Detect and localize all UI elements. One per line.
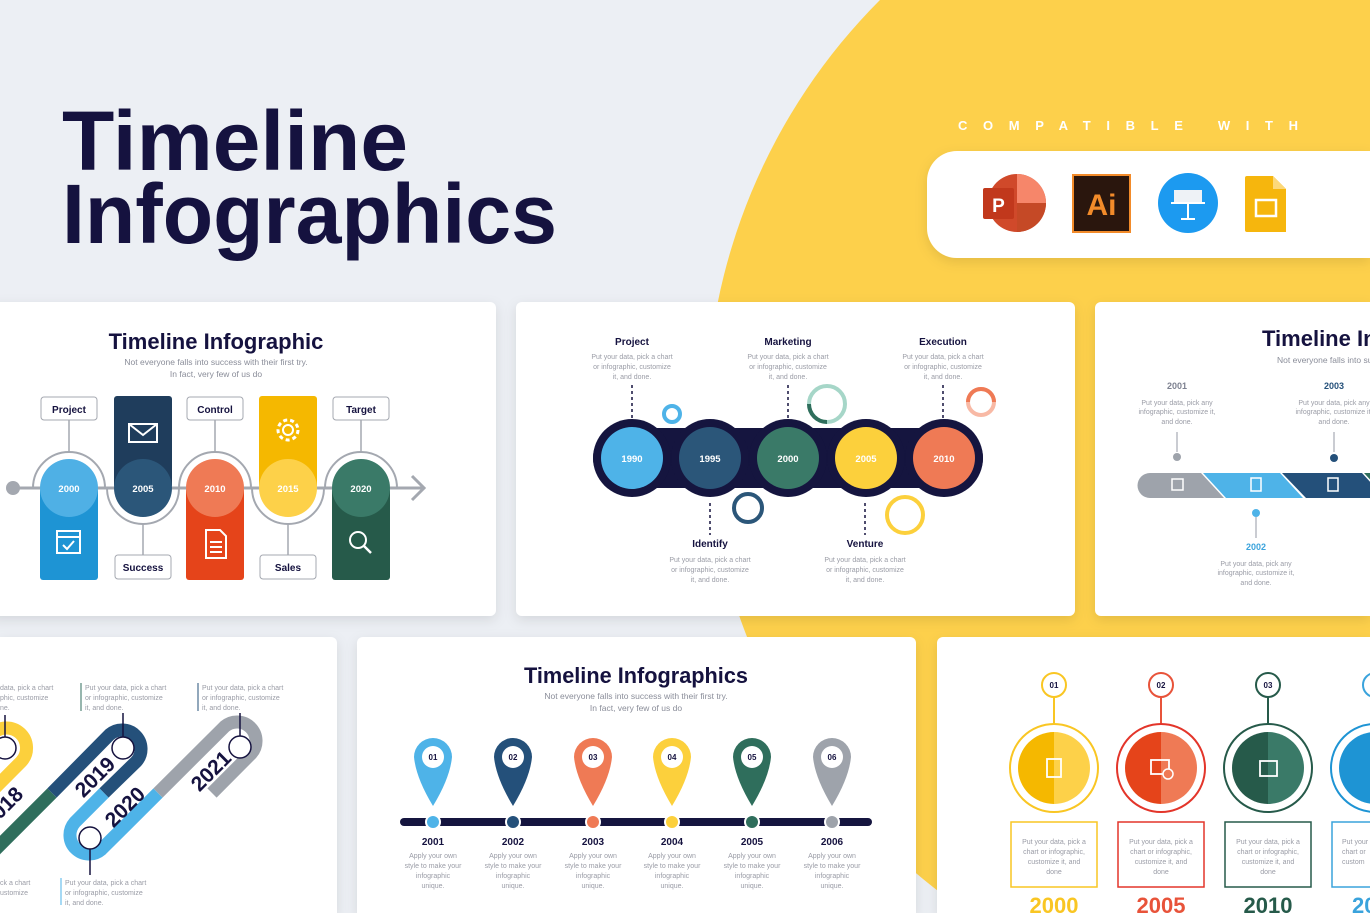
labels below: or infographic, customize — [826, 567, 904, 574]
step 04 partial: chart or — [1342, 849, 1366, 856]
step 2015 sales: Sales — [275, 563, 302, 574]
step 03 2010: customize it, and — [1242, 859, 1294, 866]
card A heading — [109, 329, 323, 379]
labels above: or infographic, customize — [593, 364, 671, 371]
step 02 2005: 02 — [1157, 681, 1166, 690]
background yellow circle — [706, 0, 1370, 913]
icon: keynote — [1158, 173, 1218, 233]
text notes: Put your data, pick a chart — [85, 685, 166, 692]
segmented bar — [1138, 473, 1370, 498]
year captions: unique. — [502, 883, 525, 890]
year labels: 2019 — [71, 753, 120, 802]
pins: 04 — [668, 753, 677, 762]
labels above: it, and done. — [769, 374, 807, 381]
step 2010 control — [186, 397, 244, 580]
chain band: 2005 — [855, 454, 877, 465]
step 2000 project — [40, 397, 98, 580]
labels below: Identify — [692, 539, 728, 550]
step 2000 project: 2000 — [58, 484, 80, 495]
milestone 2001: infographic, customize it, — [1138, 409, 1216, 416]
milestone 2003: and done. — [1318, 419, 1350, 426]
pins: 06 — [828, 753, 837, 762]
panel: card D diagonal timeline — [0, 637, 337, 913]
step 01 2000: Put your data, pick a — [1022, 839, 1086, 846]
year captions: Apply your own — [648, 853, 696, 860]
timeline bar — [404, 818, 868, 826]
step 02 2005: chart or infographic, — [1130, 849, 1192, 856]
year captions: unique. — [422, 883, 445, 890]
text notes: it, and done. — [65, 900, 104, 907]
labels above: Execution — [919, 337, 967, 348]
year captions: 2001 — [422, 837, 445, 848]
labels above: it, and done. — [924, 374, 962, 381]
milestone 2001: 2001 — [1167, 381, 1187, 391]
labels below: it, and done. — [691, 577, 729, 584]
milestone 2002 — [1217, 509, 1295, 587]
step 01 2000: 01 — [1050, 681, 1059, 690]
panel: compatible apps — [927, 151, 1370, 258]
text notes: phic, customize — [0, 695, 48, 702]
year captions: 2006 — [821, 837, 844, 848]
labels below: Put your data, pick a chart — [824, 557, 906, 564]
card A heading: Timeline Infographic — [109, 329, 323, 354]
title: Infographics — [62, 167, 557, 261]
labels below: it, and done. — [846, 577, 884, 584]
year labels — [0, 752, 232, 828]
pins: 02 — [509, 753, 518, 762]
labels above: Put your data, pick a chart — [902, 354, 984, 361]
icon: powerpoint: P — [992, 196, 1005, 217]
year captions: style to make your — [724, 863, 781, 870]
year captions: Apply your own — [409, 853, 457, 860]
text notes: data, pick a chart — [0, 685, 53, 692]
labels above: it, and done. — [613, 374, 651, 381]
labels above: Put your data, pick a chart — [747, 354, 829, 361]
year labels: 2021 — [187, 747, 236, 796]
text notes: ne. — [0, 705, 10, 712]
icon: powerpoint — [983, 174, 1046, 232]
step 03 2010 — [1224, 673, 1312, 913]
step 2020 target — [332, 397, 390, 580]
milestone 2003: 2003 — [1324, 381, 1344, 391]
year captions: infographic — [416, 873, 451, 880]
year captions: style to make your — [405, 863, 462, 870]
labels above: or infographic, customize — [904, 364, 982, 371]
step 2020 target: 2020 — [350, 484, 372, 495]
year captions: Apply your own — [569, 853, 617, 860]
year captions: unique. — [661, 883, 684, 890]
icon: illustrator: Ai — [1086, 189, 1116, 222]
chain band: 2000 — [777, 454, 799, 465]
labels above: Put your data, pick a chart — [591, 354, 673, 361]
milestone 2001 — [1138, 381, 1216, 461]
step 01 2000: chart or infographic, — [1023, 849, 1085, 856]
title: Timeline — [62, 94, 408, 188]
year captions: unique. — [582, 883, 605, 890]
labels below: or infographic, customize — [671, 567, 749, 574]
text notes: or infographic, customize — [202, 695, 280, 702]
step 01 2000: done — [1046, 869, 1062, 876]
year captions — [405, 837, 861, 890]
text notes: it, and done. — [202, 705, 241, 712]
chain band — [593, 419, 983, 497]
labels above: Project — [615, 337, 650, 348]
step 03 2010: done — [1260, 869, 1276, 876]
step 01 2000 — [1010, 673, 1098, 913]
step 01 2000: customize it, and — [1028, 859, 1080, 866]
icon: google slides — [1245, 176, 1286, 232]
text notes: ustomize — [0, 890, 28, 897]
card A heading: In fact, very few of us do — [170, 369, 262, 379]
text notes: ck a chart — [0, 880, 30, 887]
panel: card E pin timeline — [357, 637, 916, 913]
step 02 2005: done — [1153, 869, 1169, 876]
year captions: infographic — [735, 873, 770, 880]
panel: card F circle timeline — [937, 637, 1370, 913]
step 02 2005: customize it, and — [1135, 859, 1187, 866]
year captions: style to make your — [644, 863, 701, 870]
step 02 2005 — [1117, 673, 1205, 913]
text notes: Put your data, pick a chart — [202, 685, 283, 692]
chain band: 1990 — [621, 454, 643, 465]
step 03 2010: chart or infographic, — [1237, 849, 1299, 856]
text notes: or infographic, customize — [85, 695, 163, 702]
milestone 2001: and done. — [1161, 419, 1193, 426]
icon: illustrator — [1073, 175, 1130, 232]
milestone 2002: 2002 — [1246, 542, 1266, 552]
milestone 2003 — [1295, 381, 1370, 462]
step 2015 sales — [259, 396, 317, 579]
text notes: or infographic, customize — [65, 890, 143, 897]
year labels: 2020 — [101, 783, 150, 832]
text notes — [0, 683, 283, 907]
card E heading: Not everyone falls into success with their first try. — [544, 691, 728, 701]
year captions: 2005 — [741, 837, 764, 848]
year captions: infographic — [576, 873, 611, 880]
pins: 03 — [589, 753, 598, 762]
year captions: 2002 — [502, 837, 525, 848]
step 2005 success — [114, 396, 172, 579]
step 04 partial: custom — [1342, 859, 1365, 866]
labels below — [669, 503, 906, 584]
year captions: 2004 — [661, 837, 684, 848]
panel: card B bubble timeline — [516, 302, 1075, 616]
panel: card A timeline infographic — [0, 302, 496, 616]
step 03 2010: Put your data, pick a — [1236, 839, 1300, 846]
panel: card C bar timeline — [1095, 302, 1370, 616]
compatible with label: COMPATIBLE WITH — [958, 118, 1298, 133]
year captions: infographic — [815, 873, 850, 880]
text notes: it, and done. — [85, 705, 124, 712]
step 2020 target: Target — [346, 405, 377, 416]
step 2010 control: 2010 — [204, 484, 226, 495]
card E heading — [524, 663, 748, 713]
year captions: style to make your — [804, 863, 861, 870]
step 2005 success: 2005 — [132, 484, 154, 495]
milestone 2002: Put your data, pick any — [1220, 561, 1292, 568]
year captions: style to make your — [485, 863, 542, 870]
milestone 2003: Put your data, pick any — [1298, 400, 1370, 407]
snake bands — [0, 716, 262, 860]
year captions: Apply your own — [808, 853, 856, 860]
year captions: infographic — [496, 873, 531, 880]
pins: 05 — [748, 753, 757, 762]
labels above — [591, 337, 984, 418]
year captions: 2003 — [582, 837, 605, 848]
year captions: style to make your — [565, 863, 622, 870]
step 2015 sales: 2015 — [277, 484, 299, 495]
step 03 2010: 03 — [1264, 681, 1273, 690]
labels below: Put your data, pick a chart — [669, 557, 751, 564]
step 04 partial: Put your — [1342, 839, 1369, 846]
step 2005 success: Success — [123, 563, 164, 574]
pins: 01 — [429, 753, 438, 762]
year captions: infographic — [655, 873, 690, 880]
year captions: unique. — [741, 883, 764, 890]
chain band: 1995 — [699, 454, 721, 465]
labels above: Marketing — [764, 337, 812, 348]
card A heading: Not everyone falls into success with their first try. — [124, 357, 308, 367]
title — [62, 94, 557, 261]
milestone 2002: and done. — [1240, 580, 1272, 587]
step 2010 control: Control — [197, 405, 233, 416]
pins — [414, 738, 851, 830]
step 02 2005: Put your data, pick a — [1129, 839, 1193, 846]
year captions: Apply your own — [728, 853, 776, 860]
icon nodes — [0, 713, 251, 875]
decorative rings — [664, 386, 994, 533]
labels above: or infographic, customize — [749, 364, 827, 371]
labels below: Venture — [847, 539, 884, 550]
card C heading — [1262, 330, 1370, 364]
chain band: 2010 — [933, 454, 955, 465]
card E heading: In fact, very few of us do — [590, 703, 682, 713]
card E heading: Timeline Infographics — [524, 663, 748, 688]
text notes: Put your data, pick a chart — [65, 880, 146, 887]
step 04 partial — [1331, 673, 1370, 913]
year captions: unique. — [821, 883, 844, 890]
axis with arrow — [6, 452, 424, 524]
year captions: Apply your own — [489, 853, 537, 860]
step 2000 project: Project — [52, 405, 87, 416]
milestone 2002: infographic, customize it, — [1217, 570, 1295, 577]
milestone 2001: Put your data, pick any — [1141, 400, 1213, 407]
